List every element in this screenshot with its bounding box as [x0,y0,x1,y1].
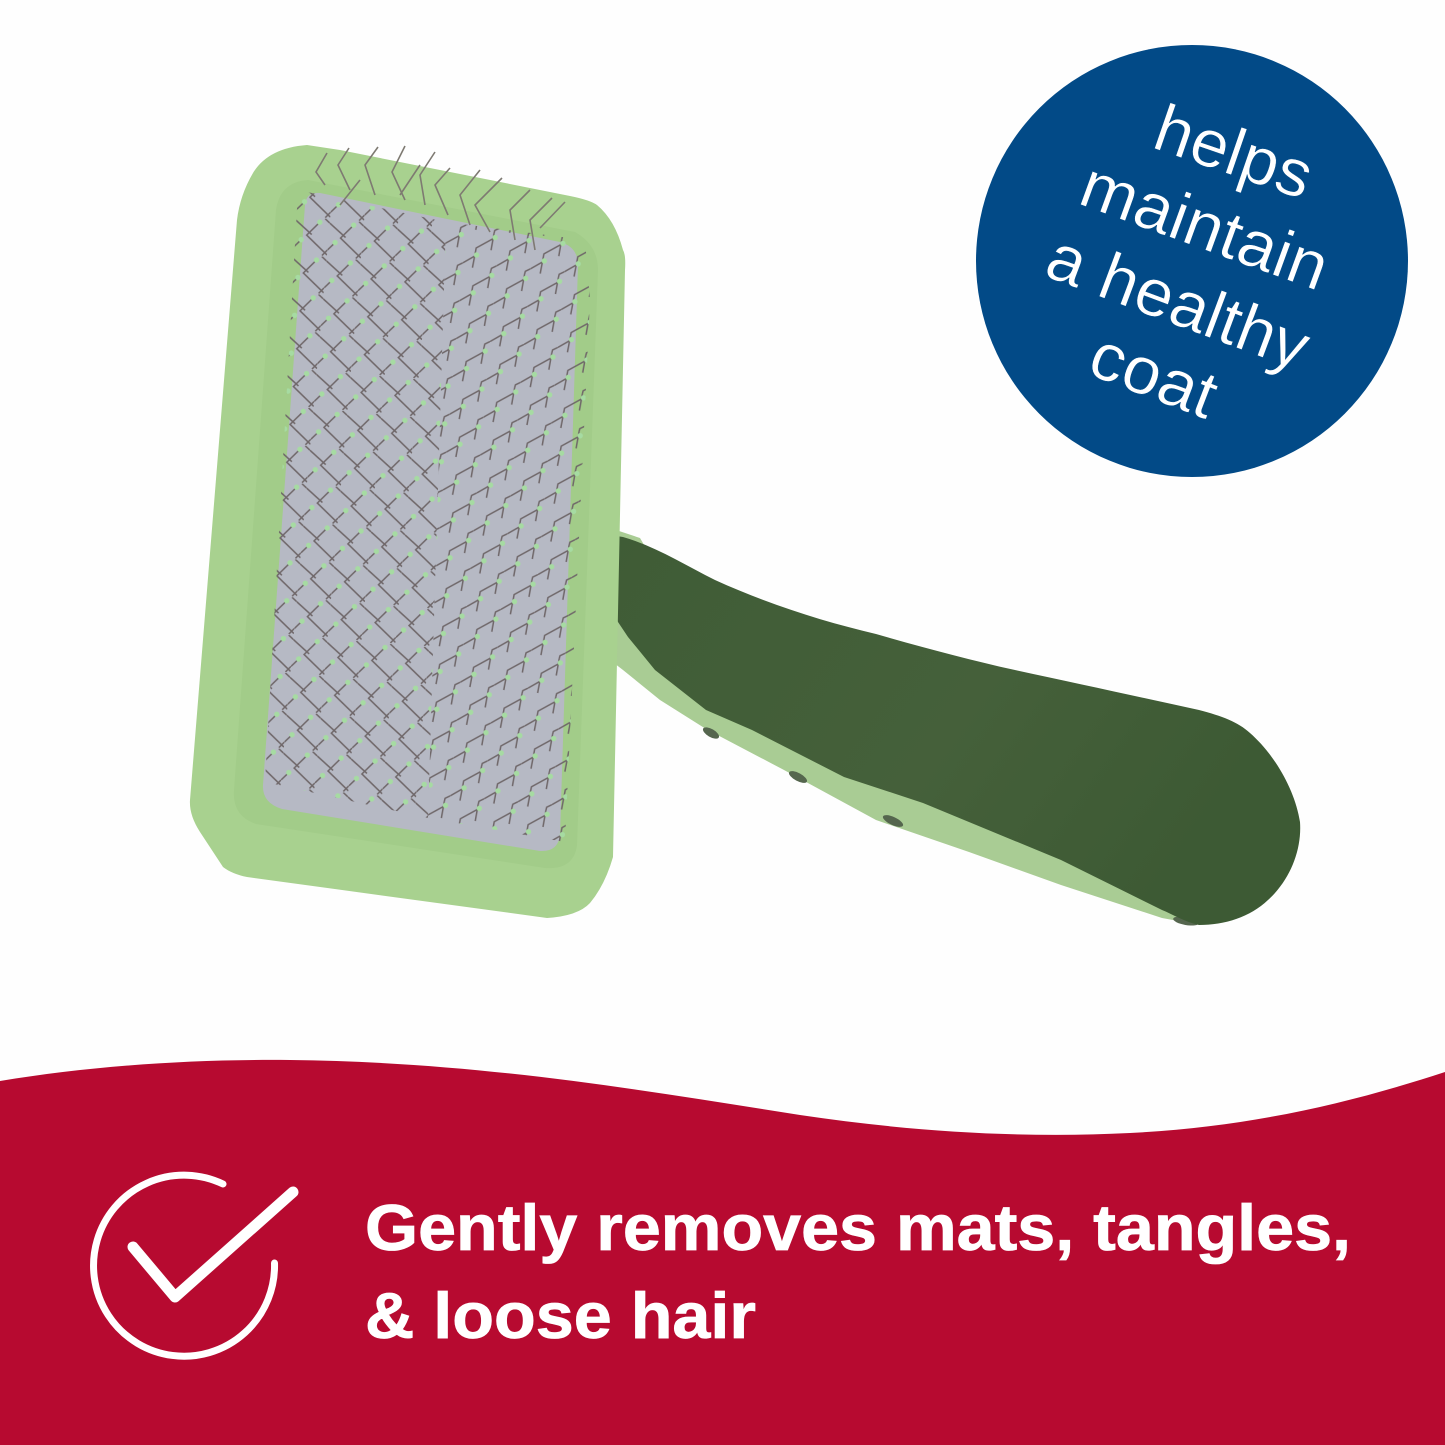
benefit text [365,1191,1351,1352]
red wave banner [0,1060,1445,1445]
handle grip [610,535,1300,925]
handle bumps [701,725,1199,927]
badge: helps maintain a healthy coat: coat [1080,317,1228,434]
brush product [190,145,1300,927]
metal plate [263,193,578,851]
brush head [190,145,625,918]
badge: helps maintain a healthy coat: a healthy [1037,219,1320,385]
benefit text: Gently removes mats, tangles, [365,1191,1351,1264]
badge: helps maintain a healthy coat: helps [1145,90,1323,214]
badge: helps maintain a healthy coat [976,45,1408,477]
bristles [266,146,590,842]
handle base [610,528,1200,925]
icon: check mark in circle [94,1175,293,1356]
benefit text: & loose hair [365,1279,756,1352]
badge: helps maintain a healthy coat: maintain [1071,147,1339,305]
